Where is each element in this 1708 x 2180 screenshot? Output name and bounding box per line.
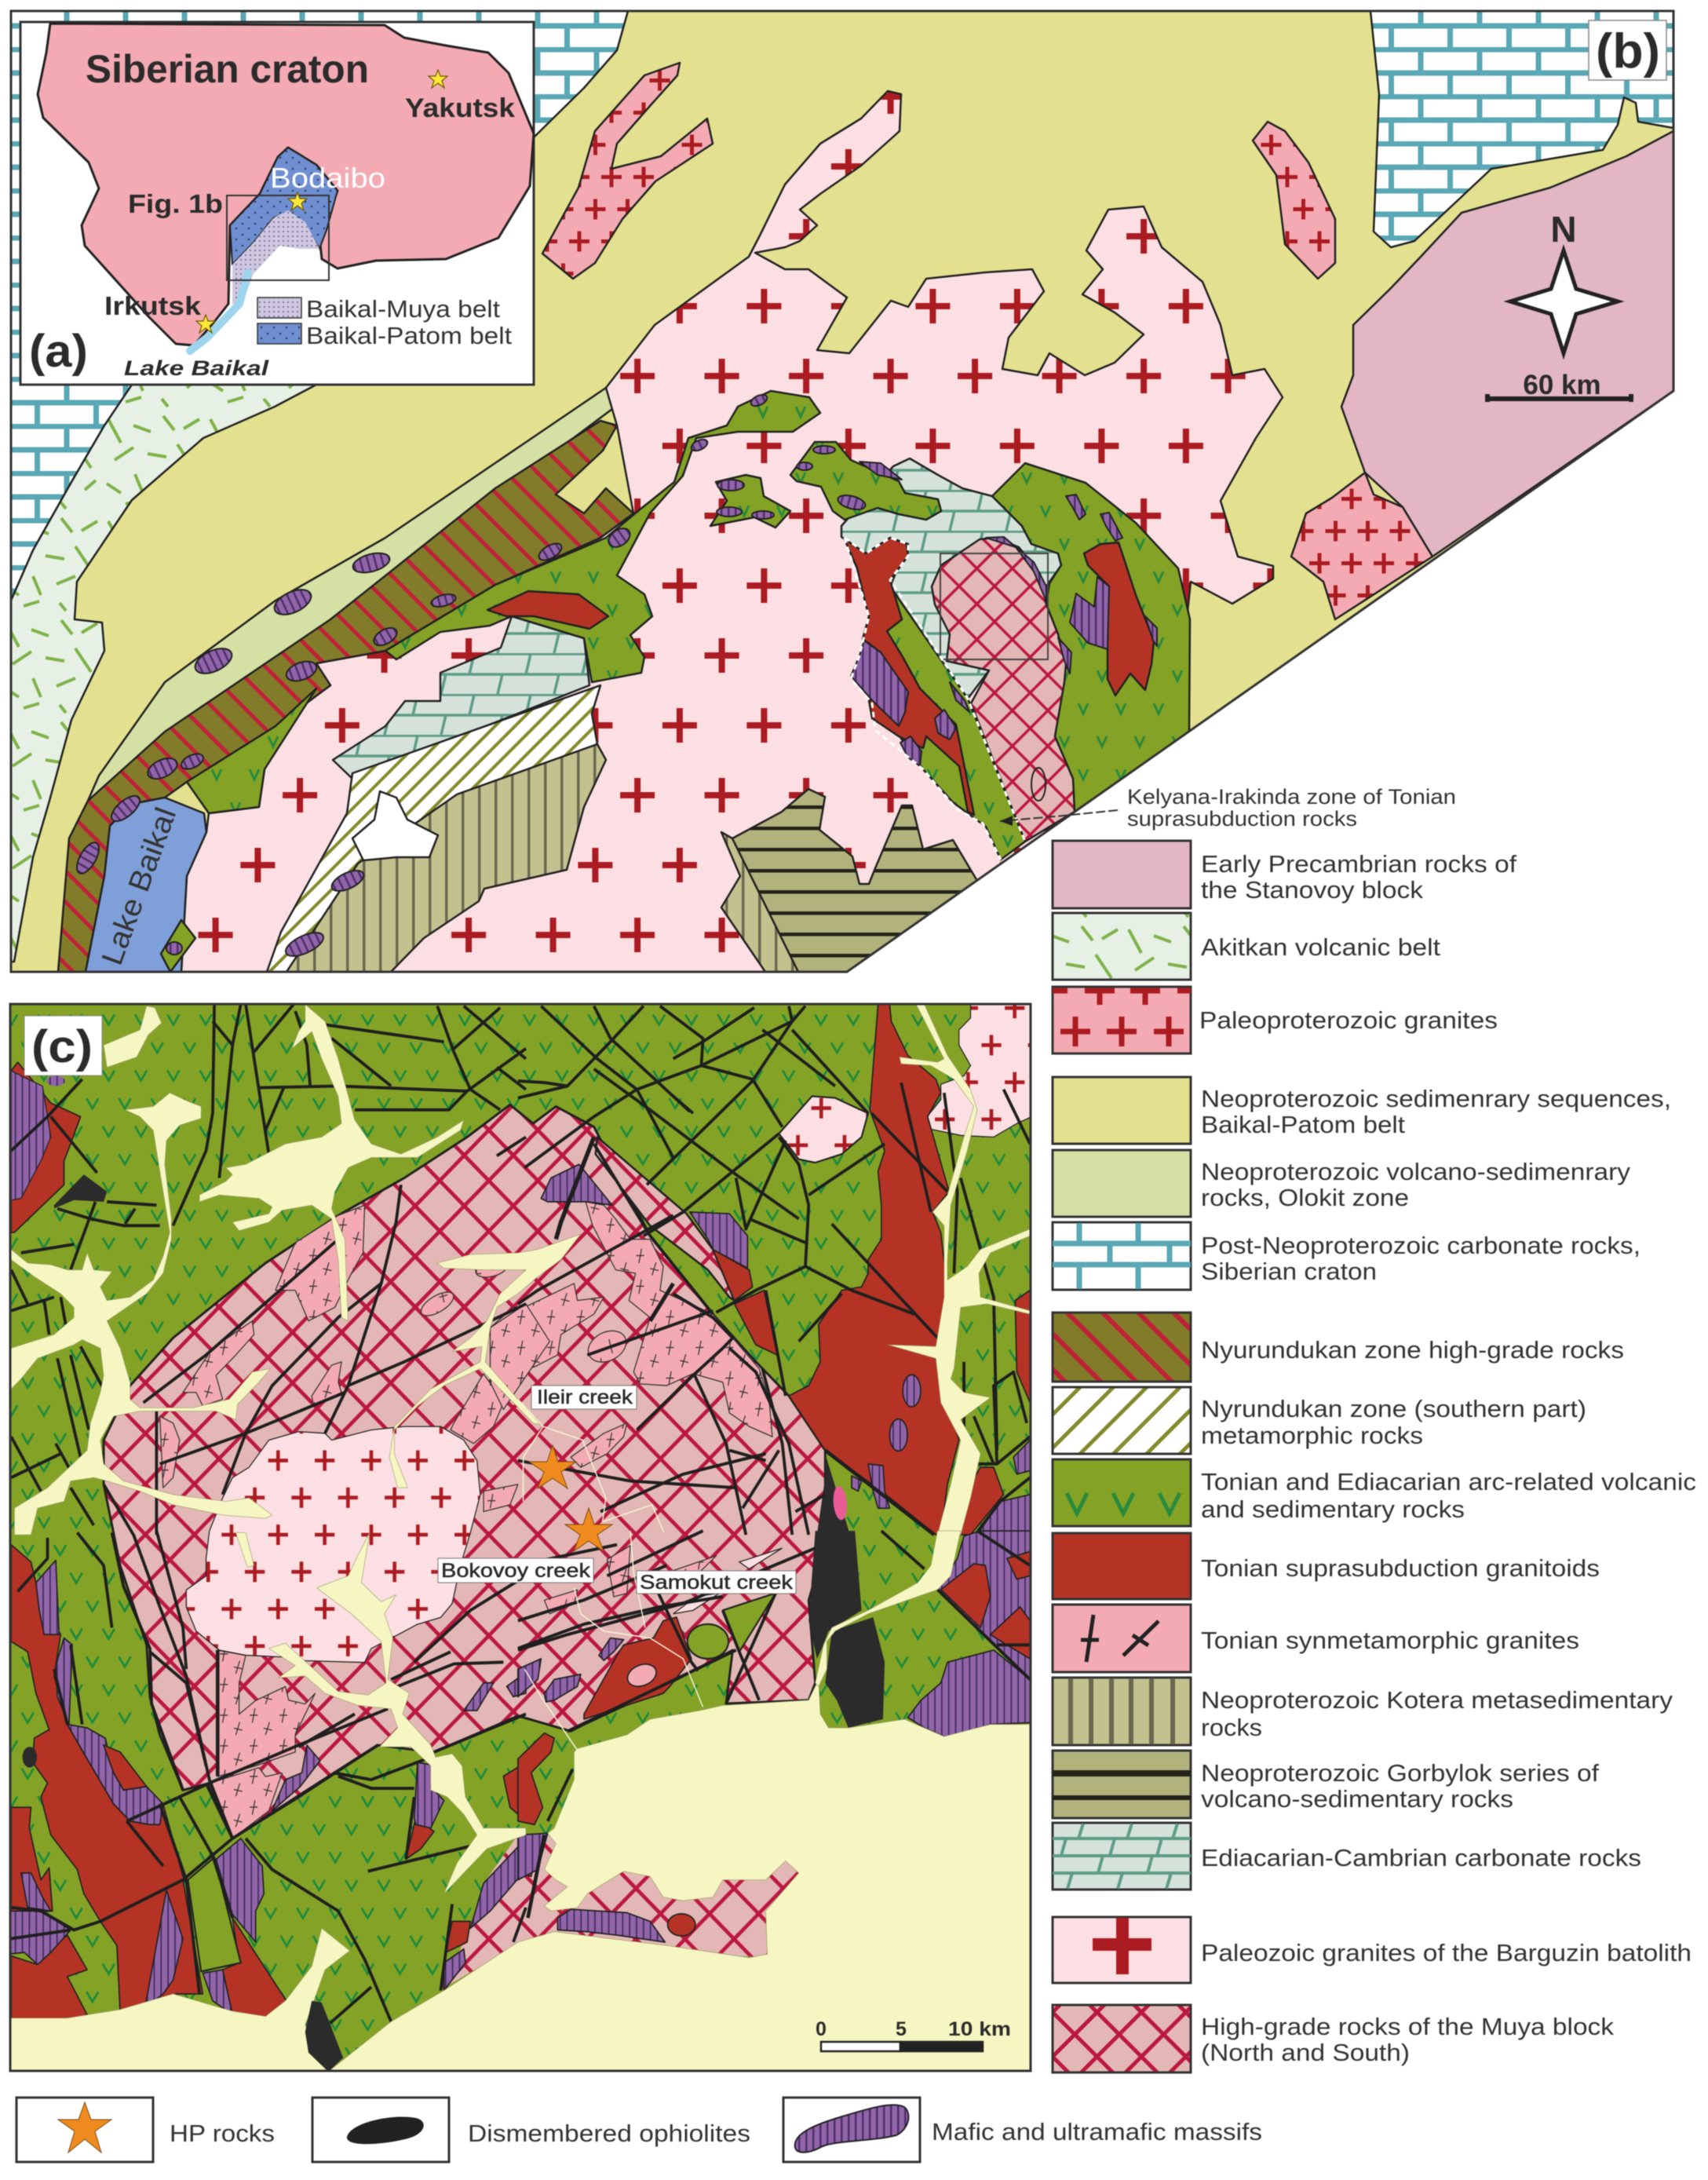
inset labels [29,47,515,380]
inset frame [20,22,534,385]
Tonian synmetamorphic granites [160,1202,772,1839]
Barguzin batolith granites [181,91,1283,972]
legend: Baikal-Patom sequences: Baikal-Patom belt [1201,1111,1405,1138]
basement window [352,791,438,860]
cream cover and granite dikes [8,1004,1042,2101]
legend: Paleoproterozoic granites [1053,987,1498,1053]
legend: Nyurundukan high-grade: Nyurundukan zone high-grade rocks [1201,1336,1624,1364]
Kelyana-Irakinda callout: suprasubduction rocks [1127,807,1357,831]
north arrow [1510,209,1618,353]
southern small ophiolite [305,2001,343,2072]
legend: arc-related rocks: and sedimentary rocks [1201,1495,1465,1523]
eastern blocks of the map [541,1004,1030,1535]
scale bar 10 km: 5 [896,2018,907,2040]
legend: Gorbylok: volcano-sedimentary rocks [1201,1785,1513,1813]
Nyurundukan high-grade zone [58,421,633,972]
label Samokut creek: Samokut creek [640,1572,794,1594]
city stars [196,70,447,333]
legend column [1053,841,1696,2072]
Paleoproterozoic granite bodies [542,63,1432,619]
legend: Nyrundukan southern: Nyrundukan zone (southern part) [1201,1395,1586,1422]
Baikal-Muya belt in inset [232,210,319,304]
legend: dismembered ophiolites: Dismembered ophiolites [468,2120,750,2147]
legend: Gorbylok [1053,1751,1599,1818]
scale bar 10 km: 10 km [948,2018,1011,2040]
legend: Akitkan [1053,913,1440,980]
Stanovoy block [1341,131,1673,557]
panel c: detailed map of the Muya block [8,1001,1042,2101]
legend: arc-related rocks [1053,1459,1696,1526]
Siberian craton [38,24,534,345]
panel frame b [11,11,1673,972]
legend: HP rocks: HP rocks [170,2120,275,2147]
legend: Post-Neoproterozoic carbonate: Post-Neoproterozoic carbonate rocks, [1201,1232,1640,1259]
Barguzin granite, north-east [925,1004,1032,1137]
Akitkan volcanic belt [11,385,316,962]
red lens in mafic body [104,1745,147,1790]
legend: Kotera: rocks [1201,1714,1262,1741]
creeks [518,1399,703,1751]
legend: Olokit zone: rocks, Olokit zone [1201,1184,1409,1211]
mafic massifs, north-east [541,1164,1030,1535]
ophiolite, large body [808,1531,885,1728]
label b: (b) [1596,24,1660,79]
inset legend: Baikal-Muya belt [306,295,500,323]
legend: Kotera [1053,1678,1673,1745]
legend: Kotera: Neoproterozoic Kotera metasedimentary [1201,1686,1673,1714]
arc rock fault strip [188,1857,241,1971]
Siberian craton carbonate rocks, west [11,11,628,601]
inset legend [257,295,512,349]
panel frame c [10,1004,1031,2071]
legend: Paleoproterozoic granites: Paleoproterozoic granites [1199,1006,1498,1034]
Muya block high-grade rocks, south [440,1835,801,1990]
north-west red and mafic block [11,1062,107,1232]
legend: synmetamorphic granites: Tonian synmetamorphic granites [1201,1627,1579,1654]
Barguzin granite lens [779,1096,868,1163]
Lake Baikal [86,798,206,972]
label Bokovoy creek: Bokovoy creek [441,1560,591,1582]
Olokit zone [69,388,615,838]
inset legend: Baikal-Patom belt [306,322,512,349]
small ophiolite, west [23,1747,37,1768]
Barguzin granite, central [186,1426,480,1663]
legend: Ediacarian-Cambrian carbonate [1053,1823,1641,1890]
legend: Nyurundukan high-grade [1053,1313,1624,1382]
Barguzin slivers near Samokut creek [673,1548,783,1614]
legend: Stanovoy block [1053,841,1516,908]
panel b: regional geological map [11,11,1673,972]
legend: Olokit zone [1053,1150,1631,1217]
Gorbylok series [732,789,977,972]
legend: dismembered ophiolites [312,2098,750,2162]
legend: mafic and ultramafic massifs: Mafic and ultramafic massifs [932,2118,1262,2145]
arc-related rocks [161,391,1190,972]
legend: synmetamorphic granites [1053,1605,1579,1672]
bottom legend [16,2098,1262,2162]
legend: Nyrundukan southern: metamorphic rocks [1201,1422,1423,1449]
legend: suprasubduction granitoids: Tonian suprasubduction granitoids [1201,1554,1600,1582]
scale bar 10 km: 0 [816,2018,827,2040]
legend: Akitkan: Akitkan volcanic belt [1201,933,1440,961]
inset labels: (a) [29,326,88,377]
legend: Stanovoy block: Early Precambrian rocks of [1201,850,1516,878]
legend: Nyrundukan southern [1053,1387,1586,1454]
legend: Post-Neoproterozoic carbonate [1053,1222,1640,1290]
legend: Barguzin batolith: Paleozoic granites of the Barguzin batolith [1201,1939,1692,1966]
inset labels: Irkutsk [104,291,202,320]
Baikal-Patom belt in inset [230,148,338,265]
Baikal-Patom sedimentary background [11,11,1673,972]
Kotera metasedimentary rocks, west [286,744,606,972]
mafic massifs, south-east [518,1531,1030,1942]
legend: Olokit zone: Neoproterozoic volcano-sedimenrary [1201,1158,1631,1185]
legend: suprasubduction granitoids [1053,1533,1600,1599]
Nyurundukan southern metamorphic zone [267,685,600,972]
Kotera metasedimentary rocks, east [721,832,798,972]
label Ileir creek: Ileir creek [537,1386,633,1408]
legend: Baikal-Patom sequences: Neoproterozoic sedimenrary sequences, [1201,1085,1671,1112]
scale bar 60 km: 60 km [1523,370,1601,400]
legend: Muya block [1053,2005,1615,2072]
Tonian suprasubduction granitoids [487,538,1154,815]
inset labels: Fig. 1b [128,189,223,218]
legend: Baikal-Patom sequences [1053,1077,1671,1144]
Kelyana-Irakinda callout: Kelyana-Irakinda zone of Tonian [1127,785,1456,809]
arc-related rocks background [8,1001,1038,2076]
figure 1b frame [227,195,329,280]
Tonian granitoids, south-west [11,1545,526,2021]
legend: arc-related rocks: Tonian and Ediacarian arc-related volcanic [1201,1468,1696,1495]
southern blocks, west [8,1545,526,2021]
legend: Stanovoy block: the Stanovoy block [1201,876,1424,904]
inset labels: Lake Baikal [124,356,269,380]
inset labels: Bodaibo [270,162,385,194]
Muya block NE fault sliver [596,1137,735,1301]
north arrow: N [1550,209,1577,250]
panel a: inset location map [20,22,534,385]
ophiolite with pink spot [817,1454,850,1535]
Lake Baikal: Lake Baikal [96,803,183,969]
pink lens in red body [625,1660,659,1690]
HP rock stars [529,1445,612,1551]
Muya block, North [932,538,1075,842]
scale bar 60 km [1487,370,1631,402]
mafic and ultramafic massifs [72,393,1157,961]
south-east blocks [518,1531,1030,1942]
scale bar 10 km [816,2018,1011,2051]
Tonian granitoids, east [713,1004,1030,1535]
Kelyana-Irakinda zone boundary [845,538,1025,860]
Muya block high-grade rocks, main [104,1105,825,1839]
legend: Muya block: (North and South) [1201,2039,1410,2066]
label c [24,1016,102,1075]
legend: mafic and ultramafic massifs [783,2098,1262,2162]
Kelyana-Irakinda callout [1000,785,1456,831]
legend: Barguzin batolith [1053,1917,1692,1983]
label c: (c) [31,1021,93,1072]
Ediacarian-Cambrian carbonates, west [333,616,589,779]
Tonian granitoids, south-east [518,1617,695,1936]
Lake Baikal in inset [190,272,248,351]
legend: Gorbylok: Neoproterozoic Gorbylok series of [1201,1759,1599,1787]
Ediacarian-Cambrian carbonates, east [841,458,1061,699]
inset labels: Yakutsk [405,93,515,123]
legend: Muya block: High-grade rocks of the Muya block [1201,2013,1615,2040]
small granite lens in Muya block [1031,768,1046,801]
inset labels: Siberian craton [86,47,369,91]
faults [11,1004,1030,2023]
legend: HP rocks [16,2098,275,2162]
arc rock windows in Muya [688,1593,776,1659]
Siberian craton carbonate rocks, east [1370,11,1673,247]
legend: Post-Neoproterozoic carbonate: Siberian craton [1201,1258,1377,1285]
legend: Ediacarian-Cambrian carbonate: Ediacarian-Cambrian carbonate rocks [1201,1844,1641,1871]
red bodies inside mafic massif [941,1552,1030,1659]
mafic massifs, south-west [8,1561,526,2014]
inset location rectangle for panel c [940,553,1048,659]
